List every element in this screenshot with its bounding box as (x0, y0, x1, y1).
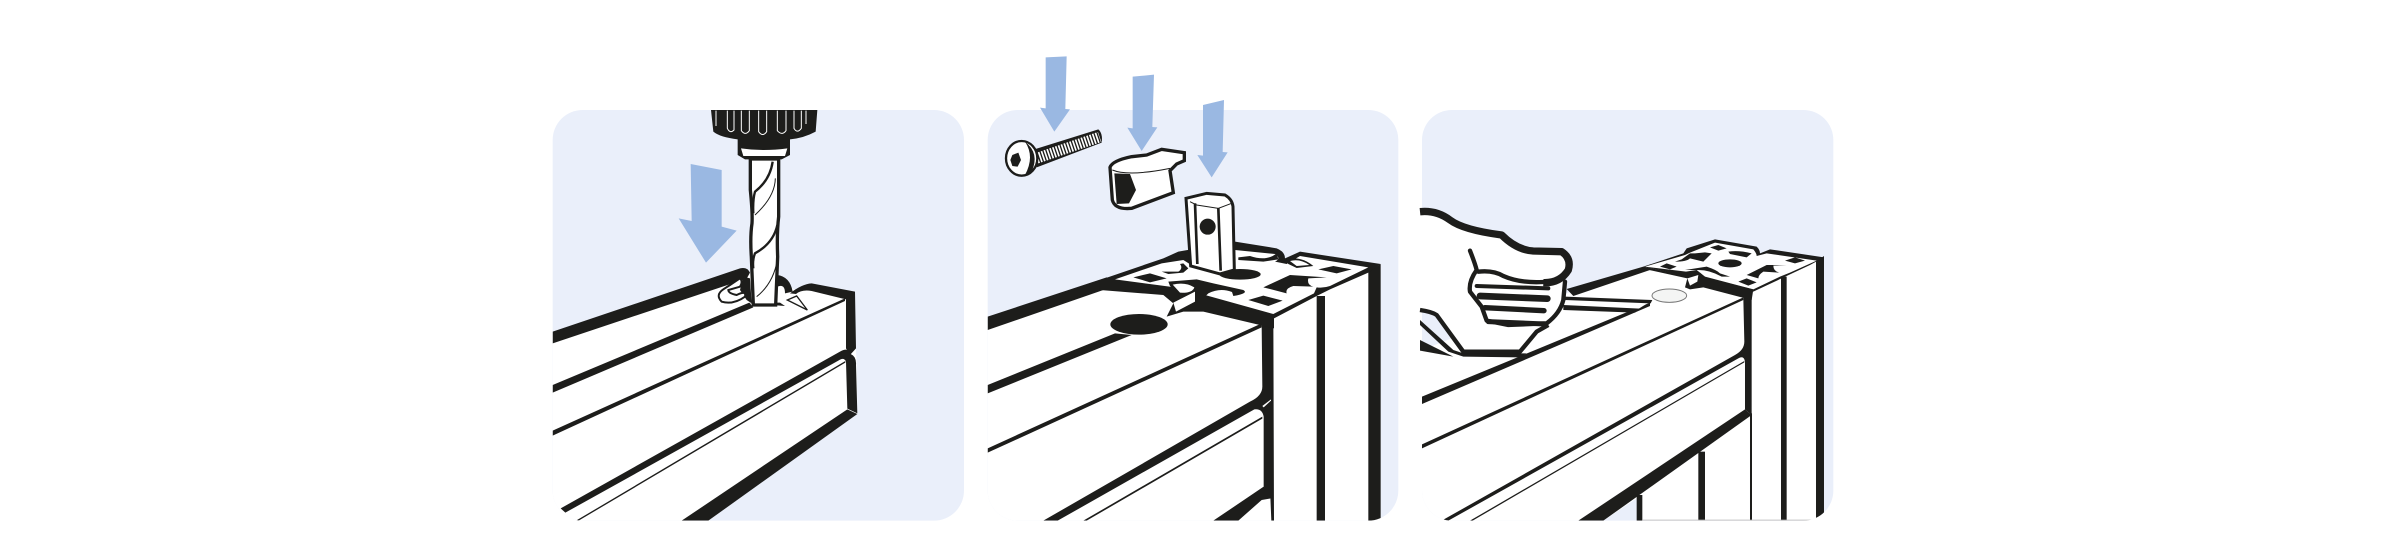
profile beam 2 (988, 264, 1381, 521)
arrows: insert parts (1040, 56, 1228, 177)
top plate 3 (1642, 239, 1824, 300)
panel background 2 (988, 110, 1398, 521)
panel background 1 (553, 110, 964, 521)
chips and hole (719, 275, 807, 310)
profile beam 1 (553, 268, 857, 521)
cam connector (1110, 149, 1184, 209)
panel: step 3 hand fitting cap (1420, 110, 1833, 521)
t-nut (1186, 193, 1234, 274)
drill bit (750, 159, 779, 305)
arrow: drill down (679, 164, 737, 263)
top plate (1100, 242, 1381, 328)
profile beam 3 (1422, 256, 1824, 521)
drill chuck (711, 110, 817, 159)
screw (1006, 129, 1102, 176)
panel background 3 (1422, 110, 1833, 521)
hand with tool (1420, 211, 1687, 357)
panel: step 1 drilling (553, 110, 964, 521)
panel: step 2 inserting connector (988, 56, 1398, 521)
